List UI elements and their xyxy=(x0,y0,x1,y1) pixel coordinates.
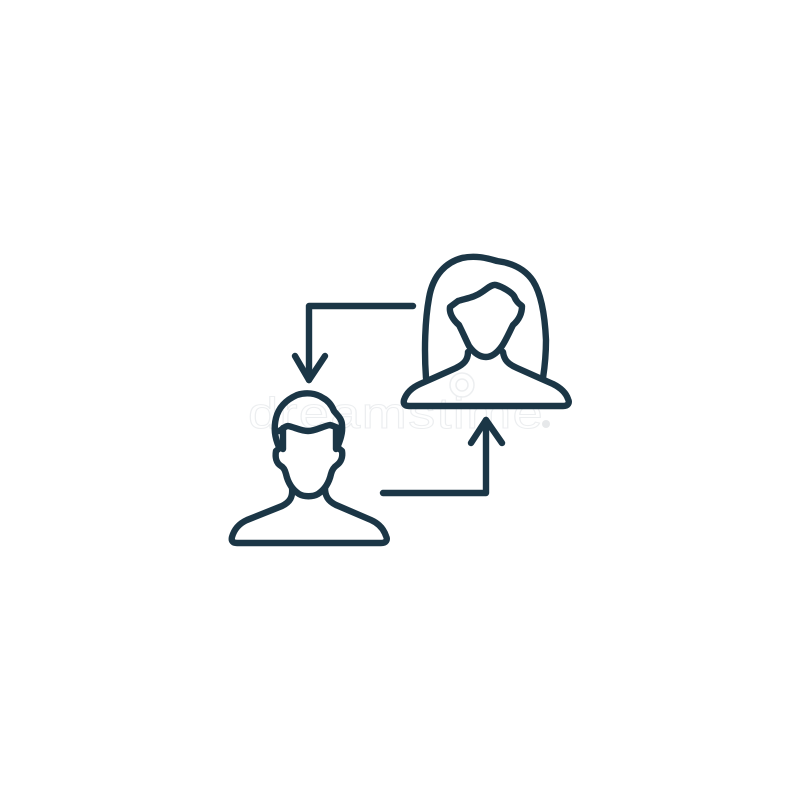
watermark text: dreamstime xyxy=(248,389,544,438)
arrow: man to woman xyxy=(383,420,502,493)
arrow: woman to man xyxy=(295,306,413,380)
icon: man avatar xyxy=(232,393,387,543)
watermark text xyxy=(248,373,550,438)
icon: woman avatar xyxy=(404,257,569,406)
